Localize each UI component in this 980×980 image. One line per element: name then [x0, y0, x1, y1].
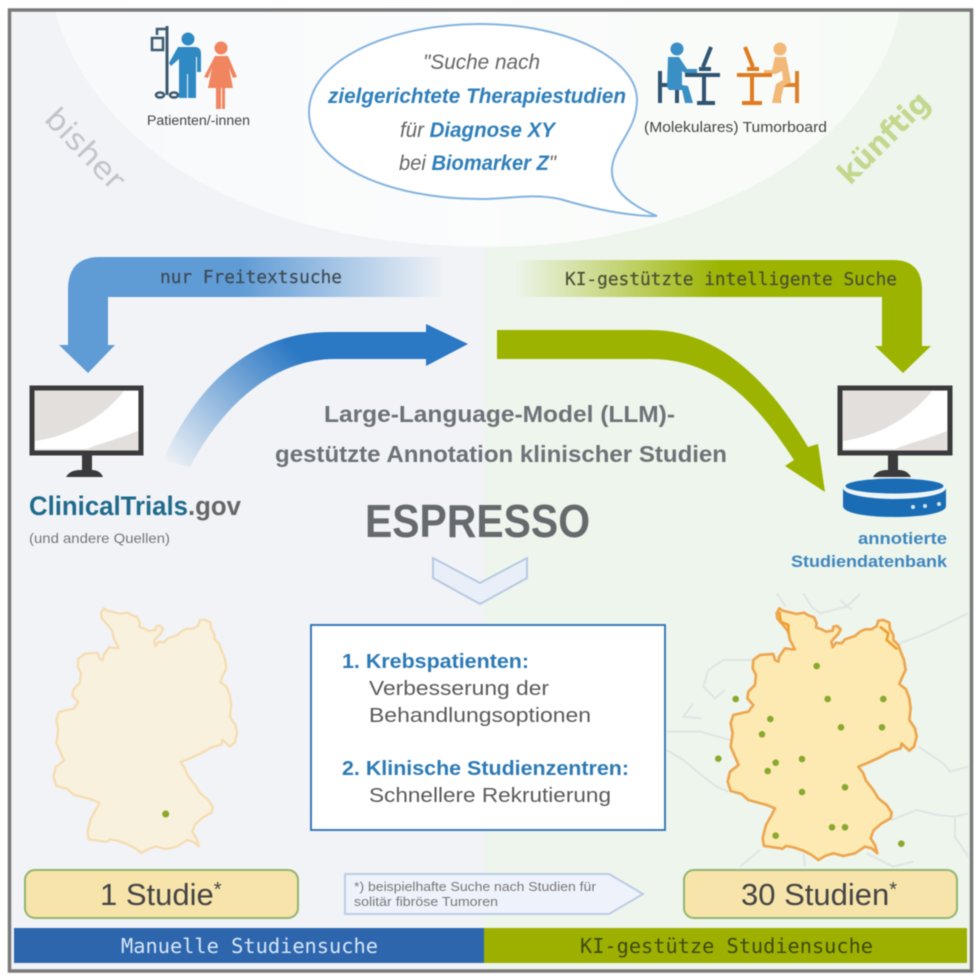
label: bisher: bisher — [37, 101, 132, 198]
footnote arrow: *) beispielhafte Suche nach Studien für — [354, 879, 597, 894]
arrow: nur Freitextsuche — [59, 257, 445, 373]
speech bubble — [309, 24, 657, 216]
result box left: * — [214, 879, 222, 901]
monitor left — [32, 388, 141, 477]
database label — [791, 529, 948, 571]
other sources note: (und andere Quellen) — [29, 530, 170, 546]
database icon — [843, 477, 946, 517]
arrow text left: nur Freitextsuche — [160, 268, 342, 288]
LLM heading: Large-Language-Model (LLM)- — [324, 401, 675, 427]
background: left half — [9, 10, 485, 971]
LLM heading: gestützte Annotation klinischer Studien — [275, 441, 727, 467]
goal 1: Verbesserung der — [369, 677, 549, 700]
result box right: * — [889, 879, 897, 901]
ESPRESSO title: ESPRESSO — [365, 495, 590, 547]
map: Germany left — [53, 608, 237, 853]
bottom bar left — [14, 928, 484, 963]
goal 1 — [342, 650, 591, 727]
bubble line 4: bei Biomarker Z" — [399, 152, 557, 175]
arrow: green curved — [497, 330, 825, 492]
bottom bar right: KI-gestütze Studiensuche — [580, 934, 873, 958]
LLM heading — [275, 401, 727, 467]
bottom bar left: Manuelle Studiensuche — [121, 934, 378, 958]
ClinicalTrials.gov logo text: ClinicalTrials.gov — [29, 491, 241, 521]
result box left: 1 Studie — [100, 877, 214, 912]
goal 1: Behandlungsoptionen — [369, 704, 591, 727]
monitor right — [840, 388, 950, 477]
database label: annotierte — [858, 529, 947, 548]
goal 2: 2. Klinische Studienzentren: — [342, 757, 629, 780]
neighbouring borders — [667, 593, 968, 867]
label: künftig: künftig — [831, 85, 938, 192]
tumorboard icon — [660, 42, 797, 103]
goal 2 — [342, 757, 629, 807]
background: right half — [485, 10, 972, 971]
tumorboard label: (Molekulares) Tumorboard — [644, 120, 827, 136]
bubble line 3: für Diagnose XY — [400, 119, 557, 142]
result box left — [25, 870, 298, 918]
bottom bar right — [484, 928, 967, 963]
database label: Studiendatenbank — [791, 552, 948, 571]
arrow: blue curved — [163, 324, 468, 467]
arrow: KI-gestützte Suche — [515, 260, 931, 373]
bubble line 2: zielgerichtete Therapiestudien — [327, 85, 626, 108]
result box right: 30 Studien — [741, 877, 889, 912]
study dot — [162, 810, 169, 818]
goal 1: 1. Krebspatienten: — [342, 650, 529, 673]
patients label: Patienten/-innen — [147, 113, 250, 128]
patients icon — [152, 26, 237, 109]
centre box: goals — [311, 625, 665, 830]
coastal island details — [779, 612, 897, 649]
footnote arrow — [345, 874, 643, 914]
top ellipse panel — [55, 11, 900, 247]
study dots — [715, 663, 905, 847]
map: Germany right — [715, 608, 917, 860]
goal 2: Schnellere Rekrutierung — [369, 784, 611, 807]
arrow text right: KI-gestützte intelligente Suche — [565, 270, 897, 290]
chevron — [433, 558, 527, 604]
result box right — [684, 870, 957, 918]
bubble line 1: "Suche nach — [423, 51, 540, 74]
footnote arrow: solitär fibröse Tumoren — [354, 894, 498, 909]
